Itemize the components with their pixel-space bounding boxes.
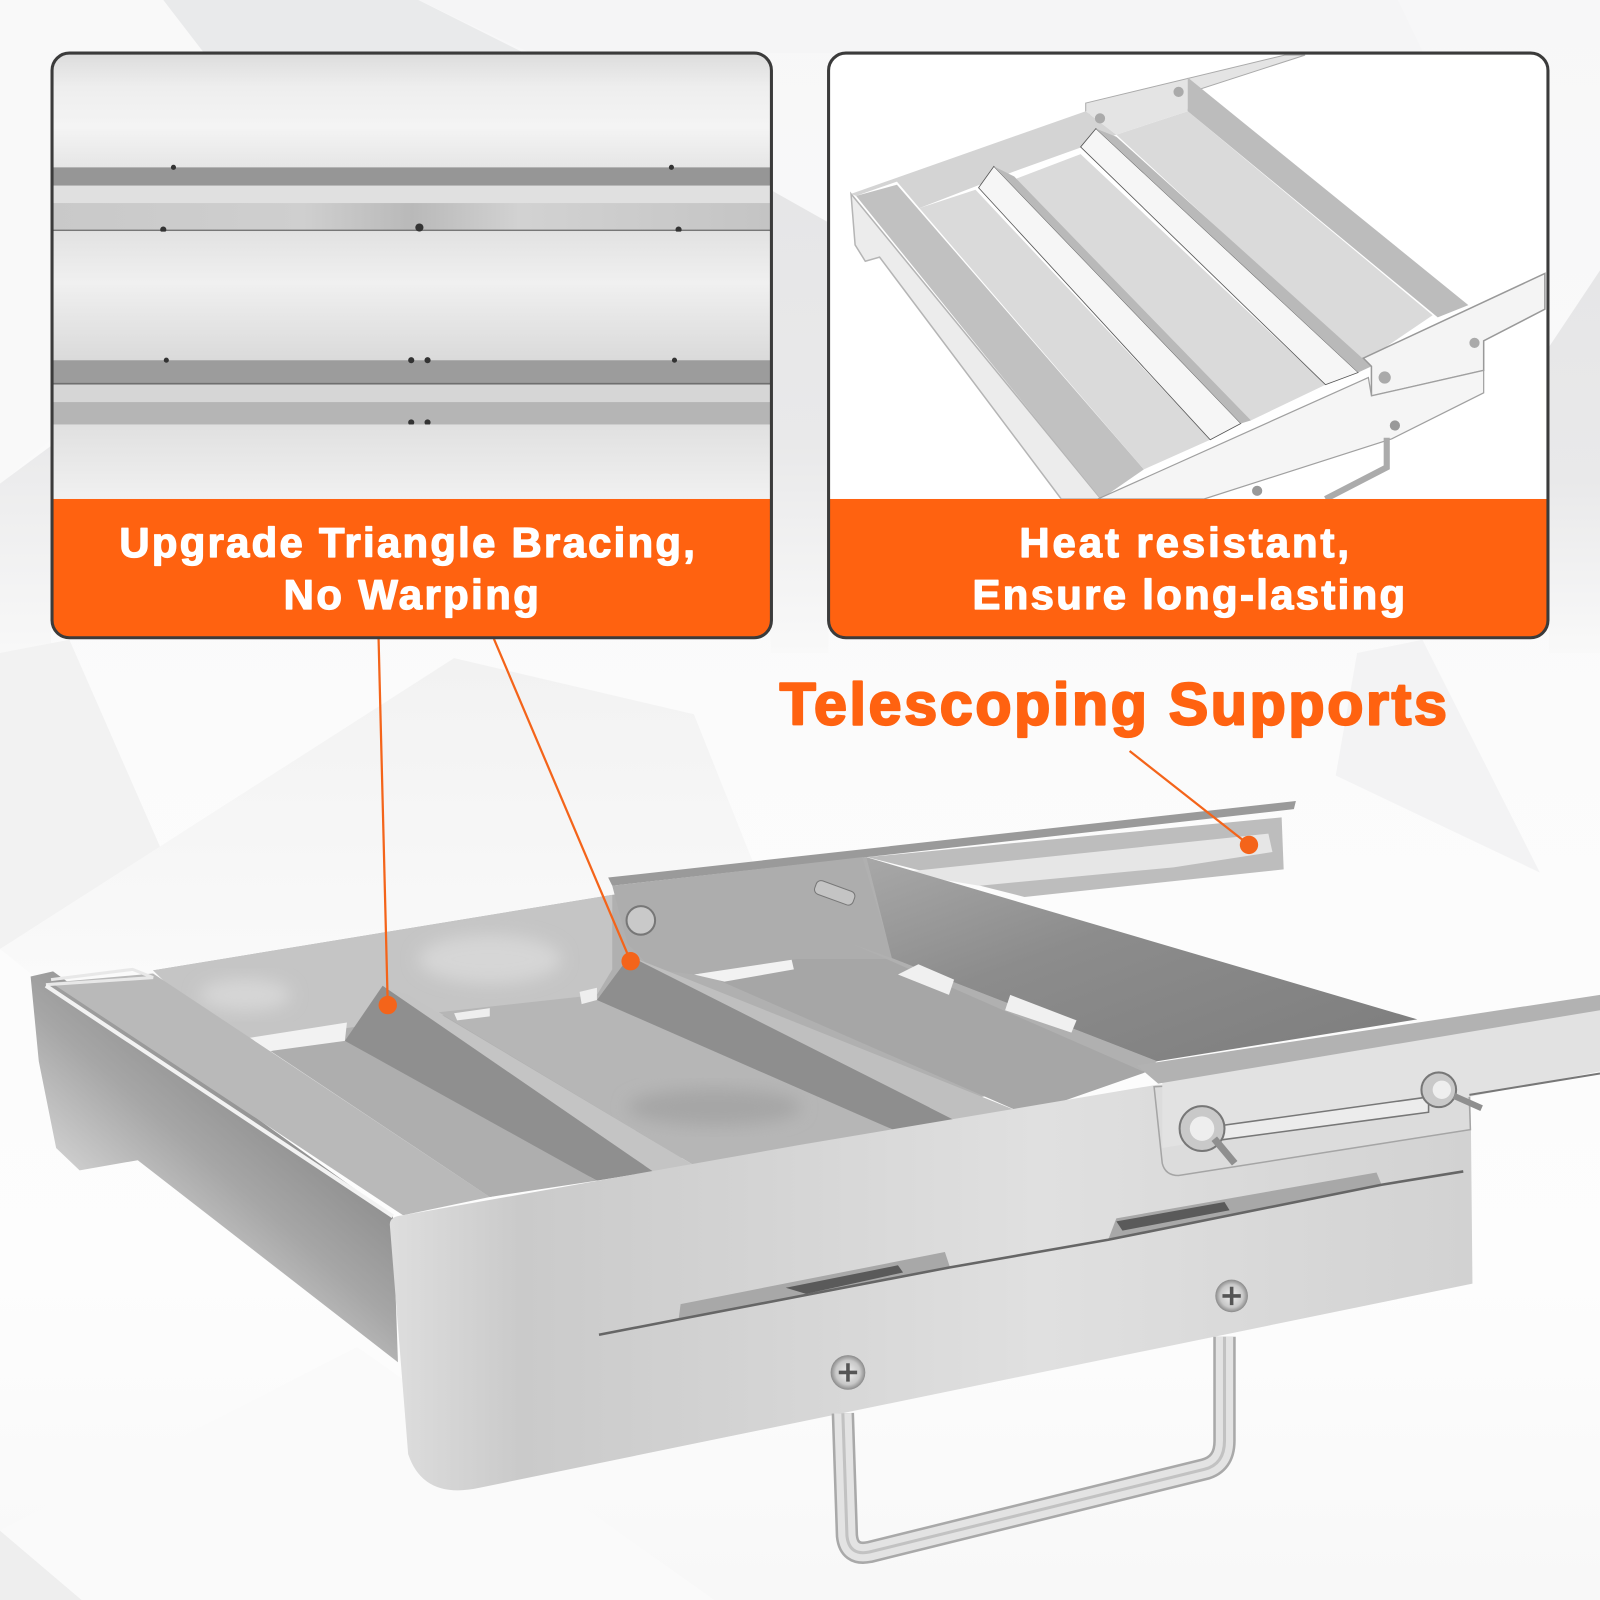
tray left foot and outer side <box>31 971 398 1362</box>
screw right <box>1215 1280 1248 1312</box>
handle <box>843 1337 1224 1553</box>
tray left strip <box>51 973 490 1215</box>
back bracket <box>612 857 893 974</box>
marker dot: brace two <box>621 952 640 970</box>
tray floor sections <box>270 1041 597 1197</box>
front plate <box>390 1071 1472 1490</box>
brace one <box>383 987 694 1171</box>
caption text line two: No Warping <box>284 571 539 618</box>
product photo: tray main view <box>31 801 1600 1553</box>
screw left <box>831 1355 865 1390</box>
tray side <box>851 194 1101 499</box>
leader line: triangle bracing 1 <box>379 639 388 1005</box>
slot shadow <box>679 1252 950 1319</box>
white slots <box>250 1022 347 1051</box>
panel: triangle bracing close-up <box>52 53 771 638</box>
right bracket plate <box>1154 1071 1470 1176</box>
brace bar upper <box>52 165 771 233</box>
braces <box>979 166 1241 440</box>
brace two <box>630 956 1026 1122</box>
caption text: Upgrade Triangle Bracing, <box>119 519 695 566</box>
tray illustration <box>851 55 1545 499</box>
far rail <box>1086 55 1305 114</box>
front plate <box>1098 370 1484 499</box>
telescoping rail far side <box>867 817 1284 897</box>
caption text line two: Ensure long-lasting <box>972 571 1405 618</box>
wing nut right <box>1421 1072 1482 1108</box>
floor sections <box>919 190 1210 469</box>
left strip <box>856 185 1144 499</box>
right rail and plate <box>1363 273 1545 396</box>
leader line: triangle bracing 2 <box>494 639 631 961</box>
caption text: Heat resistant, <box>1019 519 1349 566</box>
wing screws on back bracket <box>627 906 655 935</box>
panel: heat resistant tray view <box>829 53 1548 638</box>
right wall <box>866 857 1417 1061</box>
back bracket and right wall <box>1086 109 1188 134</box>
marker dot: telescoping supports <box>1240 836 1258 854</box>
leader line: telescoping supports <box>1130 751 1249 845</box>
back strip <box>851 111 1116 208</box>
tray base fill <box>153 857 1157 1197</box>
marker dot: brace one <box>379 996 397 1014</box>
heading: telescoping supports: Telescoping Supports <box>780 670 1447 737</box>
tray back wall <box>153 895 612 1041</box>
brace bar lower <box>52 357 771 426</box>
handle <box>1326 438 1387 499</box>
wing nut left <box>1180 1106 1235 1163</box>
